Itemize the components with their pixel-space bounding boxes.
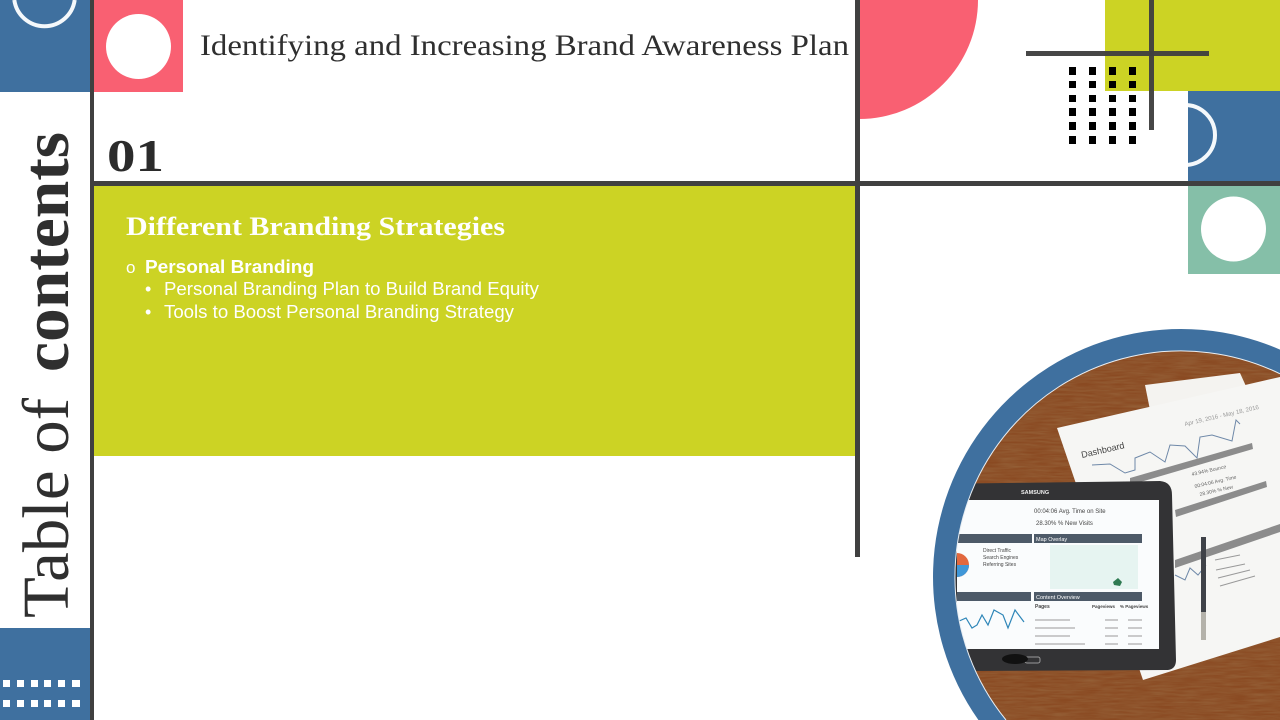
list: personal branding: • [145, 279, 151, 299]
tablet: 00:04:06 Avg. Time on Site [1034, 509, 1106, 515]
title: Identifying and Increasing Brand Awareness Plan [200, 29, 849, 62]
pink quarter circle [859, 0, 978, 119]
back paper [1145, 373, 1246, 407]
tablet [955, 481, 1176, 671]
pink square with white circle [94, 0, 183, 92]
tablet: Search Engines [983, 555, 1019, 561]
report paper: 28.30% % New [1199, 484, 1234, 498]
vertical heading: Table of contents: Table of [10, 398, 83, 618]
vertical heading: Table of contents [10, 132, 83, 618]
list: personal branding: • [145, 302, 151, 322]
report paper: Apr 19, 2016 - May 18, 2016 [1184, 405, 1260, 428]
tablet: Content Overview [1036, 595, 1080, 601]
vertical heading: Table of contents: contents [10, 132, 83, 372]
lime corner block [1105, 0, 1280, 91]
cross lines [1026, 0, 1209, 130]
list: personal branding: Tools to Boost Personal Branding Strategy [164, 302, 514, 322]
section number: 01 [107, 131, 164, 181]
tablet: Direct Traffic [983, 548, 1011, 554]
report paper: 43.94% Bounce [1191, 464, 1227, 478]
pen [1201, 537, 1206, 640]
left sidebar: bottom blue block with dots [0, 628, 90, 720]
tablet: Pageviews [1092, 604, 1116, 609]
wood desk [976, 351, 1280, 720]
report paper: Dashboard [1080, 440, 1125, 460]
tablet: SAMSUNG [1021, 490, 1049, 496]
photo circle: tablet and reports on a desk [930, 329, 1280, 720]
report paper [1057, 377, 1280, 680]
tablet: % Pageviews [1120, 604, 1149, 609]
blue block with ring [1188, 91, 1280, 181]
list: personal branding: Personal Branding Plan to Build Brand Equity [164, 279, 539, 299]
tablet: 28.30% % New Visits [1036, 521, 1093, 527]
tablet: Map Overlay [1036, 537, 1067, 543]
lime content panel [94, 186, 856, 456]
dot grid [1069, 67, 1136, 144]
teal block with white circle [1188, 185, 1280, 274]
left sidebar: top blue block [0, 0, 90, 92]
list: personal branding: Personal Branding [145, 257, 314, 277]
report paper: 00:04:06 Avg. Time [1194, 474, 1237, 490]
panel heading: Different Branding Strategies [126, 212, 505, 241]
tablet: Pages [1035, 604, 1050, 610]
list: personal branding [126, 257, 539, 322]
tablet: Referring Sites [983, 562, 1017, 568]
list: personal branding: o [126, 258, 135, 277]
